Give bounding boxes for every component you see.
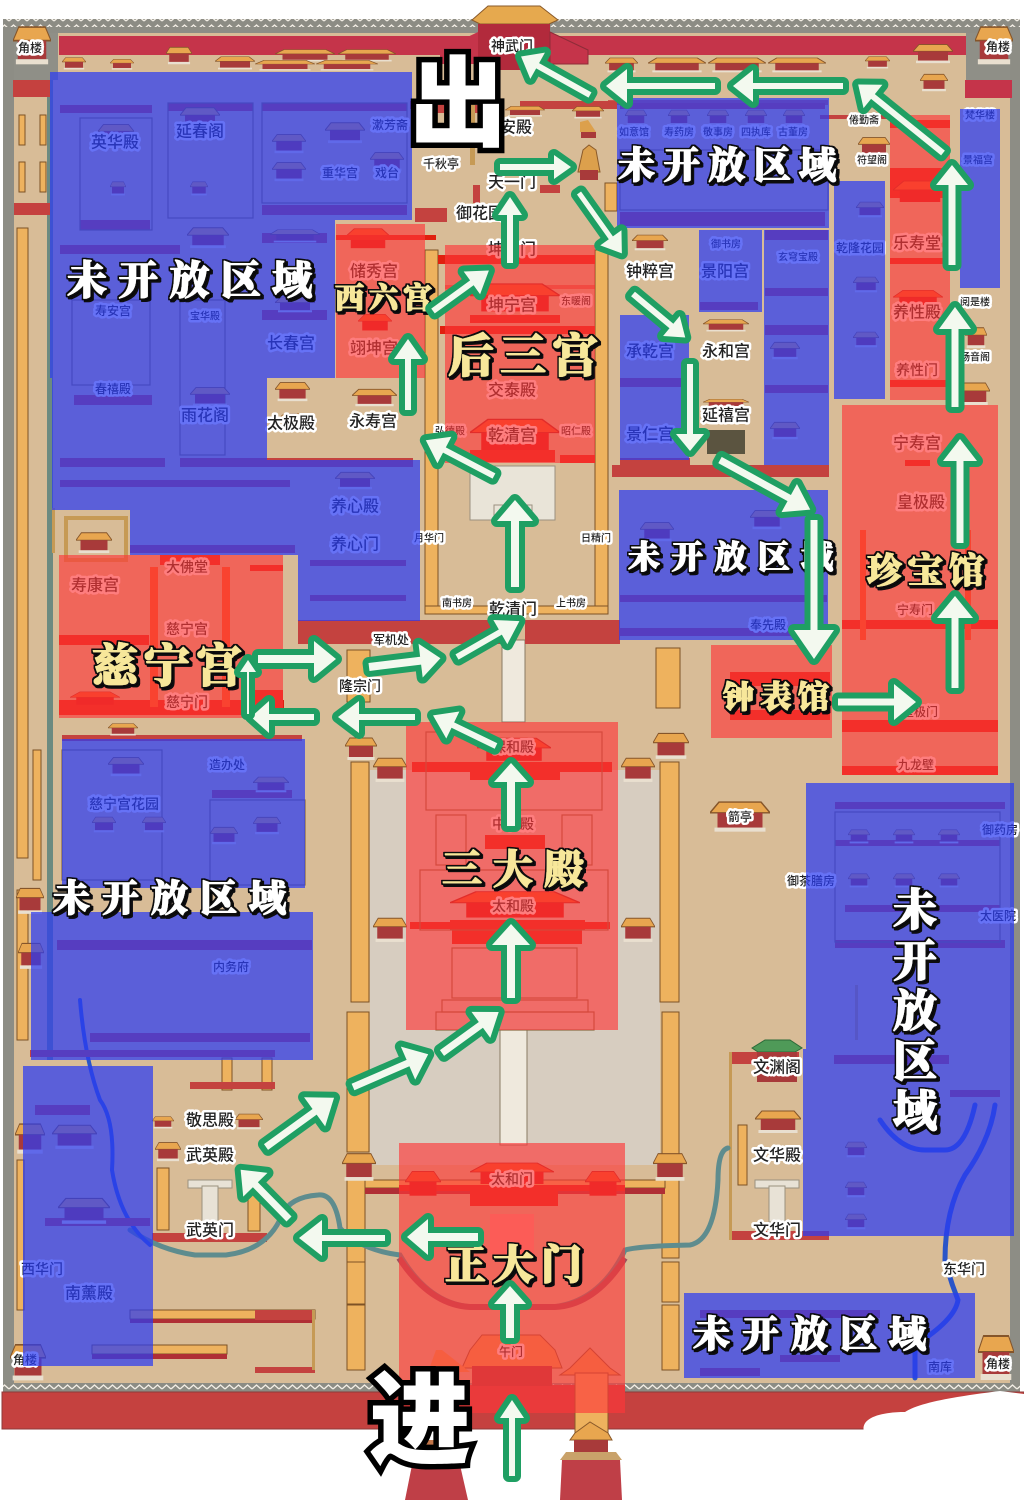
- place-name labels: central axis: 乾清宫: [488, 426, 536, 444]
- labels: closed areas 未开放区域: 未: [893, 886, 937, 935]
- place-name labels: west: 内务府: [213, 959, 249, 974]
- place-name labels: east: 敬事房: [703, 126, 733, 138]
- place-name labels: east: 文华门: [753, 1220, 801, 1240]
- labels: open sights: 正大门: [445, 1242, 582, 1288]
- place-name labels: central axis: 太和门: [491, 1171, 533, 1187]
- place-name labels: east: 宁寿门: [897, 602, 933, 617]
- place-name labels: east: 御药房: [982, 822, 1018, 837]
- labels: closed areas 未开放区域: 放: [893, 987, 937, 1036]
- 神武门 gate tower: [440, 6, 588, 70]
- place-name labels: west: 敬思殿: [186, 1112, 234, 1130]
- top row of buildings and north wall: [62, 45, 953, 109]
- place-name labels: central axis: 钦安殿: [484, 118, 532, 136]
- place-name labels: west: 永寿宫: [349, 412, 397, 430]
- labels: open sights: 慈宁宫: [92, 641, 242, 692]
- place-name labels: west: 慈宁宫: [166, 621, 208, 637]
- place-name labels: west: 武英殿: [186, 1146, 234, 1164]
- place-name labels: east: 箭亭: [728, 809, 752, 824]
- place-name labels: central axis: 南书房: [442, 596, 472, 610]
- place-name labels: east: 御书房: [711, 238, 741, 250]
- place-name labels: west: [13, 40, 408, 1367]
- place-name labels: east: 文渊阁: [753, 1058, 801, 1076]
- 午门 and front towers: [400, 1335, 625, 1500]
- entrance marker 进: 进: [369, 1364, 471, 1478]
- 武英殿 and 文华殿 terraces: [188, 1180, 799, 1222]
- labels: closed areas 未开放区域: 未开放区域: [628, 539, 833, 575]
- place-name labels: east: 太医院: [980, 908, 1016, 923]
- place-name labels: central axis: 中和殿: [492, 816, 534, 832]
- labels: closed areas 未开放区域: [53, 145, 937, 1356]
- labels: open sights: 钟表馆: [723, 680, 829, 715]
- place-name labels: central axis: 东暖阁: [561, 294, 591, 308]
- place-name labels: east: 承乾宫: [626, 342, 674, 360]
- place-name labels: west: 漱芳斋: [372, 117, 408, 132]
- place-name labels: east: 延禧宫: [702, 406, 750, 424]
- place-name labels: west: 角楼: [13, 1352, 37, 1367]
- labels: closed areas 未开放区域: 未开放区域: [53, 878, 286, 920]
- place-name labels: west: 养心殿: [331, 498, 379, 516]
- place-name labels: east: 古董房: [778, 126, 808, 138]
- place-name labels: west: 翊坤宫: [350, 340, 398, 358]
- place-name labels: east: 畅音阁: [960, 350, 990, 364]
- labels: open sights: [92, 281, 984, 1288]
- small pavilions across the map: [15, 105, 990, 1229]
- place-name labels: west: 春禧殿: [95, 381, 131, 396]
- place-name labels: west: 西华门: [21, 1261, 63, 1277]
- place-name labels: west: 寿安宫: [95, 303, 131, 318]
- place-name labels: east: 角楼: [986, 1356, 1010, 1371]
- place-name labels: west: 角楼: [18, 40, 42, 55]
- place-name labels: central axis: 保和殿: [492, 739, 534, 755]
- place-name labels: west: 宝华殿: [190, 310, 220, 322]
- place-name labels: west: 大佛堂: [166, 559, 208, 575]
- place-name labels: east: 皇极门: [902, 704, 938, 719]
- labels: open sights: 三大殿: [442, 847, 584, 892]
- place-name labels: central axis: 交泰殿: [488, 380, 536, 400]
- place-name labels: central axis: 御花园: [456, 204, 504, 222]
- place-name labels: central axis: 日精门: [581, 532, 611, 544]
- labels: open sights: 珍宝馆: [867, 552, 984, 591]
- orange perimeter walls: [17, 100, 858, 1373]
- place-name labels: west: 养心门: [331, 534, 379, 554]
- place-name labels: west: 重华宫: [322, 165, 358, 180]
- route arrows: [229, 43, 977, 1476]
- place-name labels: central axis: 太和殿: [492, 898, 534, 914]
- labels: closed areas 未开放区域: 开: [893, 937, 937, 986]
- labels: open sights: 西六宫: [335, 281, 432, 315]
- place-name labels: central axis: 弘德殿: [435, 424, 465, 438]
- white retouch patch at bottom right: [863, 1391, 1024, 1432]
- place-name labels: east: 奉先殿: [750, 617, 786, 632]
- place-name labels: east: 养性殿: [893, 304, 941, 322]
- place-name labels: central axis: 昭仁殿: [561, 426, 591, 438]
- place-name labels: east: 钟粹宫: [626, 262, 674, 280]
- place-name labels: west: 慈宁门: [166, 694, 208, 710]
- place-name labels: east: 景福宫: [963, 154, 993, 166]
- place-name labels: east: 如意馆: [619, 126, 649, 138]
- place-name labels: central axis: 午门: [499, 1344, 523, 1359]
- place-name labels: east: 玄穹宝殿: [778, 250, 818, 264]
- place-name labels: central axis: [339, 38, 611, 1359]
- place-name labels: east: 皇极殿: [897, 494, 945, 512]
- place-name labels: east: 景仁宫: [626, 426, 674, 444]
- place-name labels: central axis: 上书房: [556, 596, 586, 610]
- place-name labels: central axis: 千秋亭: [423, 156, 459, 171]
- labels: closed areas 未开放区域: 未开放区域: [618, 145, 836, 187]
- open highlights (red overlays): [59, 115, 998, 1413]
- labels: open sights: 后三宫: [448, 331, 598, 382]
- moat / inner river: [80, 1000, 995, 1378]
- place-name labels: east: 角楼: [986, 39, 1010, 54]
- place-name labels: west: 造办处: [209, 757, 245, 772]
- place-name labels: central axis: 月华门: [414, 532, 444, 544]
- place-name labels: west: 太极殿: [267, 414, 315, 432]
- place-name labels: east: 四执库: [741, 126, 771, 138]
- place-name labels: east: 御茶膳房: [787, 873, 835, 888]
- place-name labels: east: 乾隆花园: [836, 240, 884, 255]
- place-name labels: west: 戏台: [375, 165, 399, 180]
- place-name labels: east: 养性门: [896, 362, 938, 378]
- place-name labels: west: 寿康宫: [71, 576, 119, 594]
- place-name labels: central axis: 坤宁宫: [488, 296, 536, 314]
- place-name labels: east: 倦勤斋: [849, 114, 879, 126]
- place-name labels: west: 延春阁: [176, 122, 224, 140]
- place-name labels: east: 文华殿: [753, 1146, 801, 1164]
- place-name labels: east: 南库: [928, 1359, 952, 1374]
- place-name labels: west: 慈宁宫花园: [89, 796, 159, 812]
- exit marker 出: 出: [409, 49, 507, 159]
- place-name labels: east: 永和宫: [702, 342, 750, 360]
- place-name labels: west: 武英门: [186, 1220, 234, 1240]
- place-name labels: central axis: 乾清门: [489, 600, 537, 618]
- place-name labels: east: 乐寿堂: [893, 234, 941, 252]
- labels: closed areas 未开放区域: 区: [893, 1037, 937, 1086]
- labels: closed areas 未开放区域: 未开放区域: [67, 258, 312, 303]
- bright red palace halls under the red overlays: [59, 120, 998, 1307]
- place-name labels: west: 雨花阁: [181, 406, 229, 424]
- place-name labels: east: 符望阁: [857, 154, 887, 166]
- place-name labels: central axis: 天一门: [488, 172, 536, 192]
- labels: closed areas 未开放区域: 域: [893, 1087, 937, 1136]
- place-name labels: west: 英华殿: [91, 134, 139, 152]
- place-name labels: east: 梵华楼: [965, 108, 995, 122]
- place-name labels: central axis: 神武门: [491, 38, 533, 54]
- place-name labels: east: 东华门: [943, 1261, 985, 1277]
- place-name labels: east: 景阳宫: [701, 262, 749, 280]
- place-name labels: central axis: 坤宁门: [488, 240, 536, 258]
- place-name labels: central axis: 隆宗门: [339, 678, 381, 694]
- place-name labels: east: [619, 39, 1018, 1374]
- place-name labels: east: 宁寿宫: [893, 434, 941, 452]
- labels: closed areas 未开放区域: 未开放区域: [693, 1314, 926, 1356]
- place-name labels: west: 长春宫: [267, 334, 315, 352]
- place-name labels: west: 储秀宫: [350, 262, 398, 280]
- place-name labels: east: 九龙壁: [898, 757, 934, 772]
- place-name labels: east: 寿药房: [664, 126, 694, 138]
- place-name labels: west: 南薰殿: [65, 1284, 113, 1302]
- place-name labels: central axis: 军机处: [373, 632, 409, 647]
- place-name labels: east: 阅是楼: [960, 296, 990, 308]
